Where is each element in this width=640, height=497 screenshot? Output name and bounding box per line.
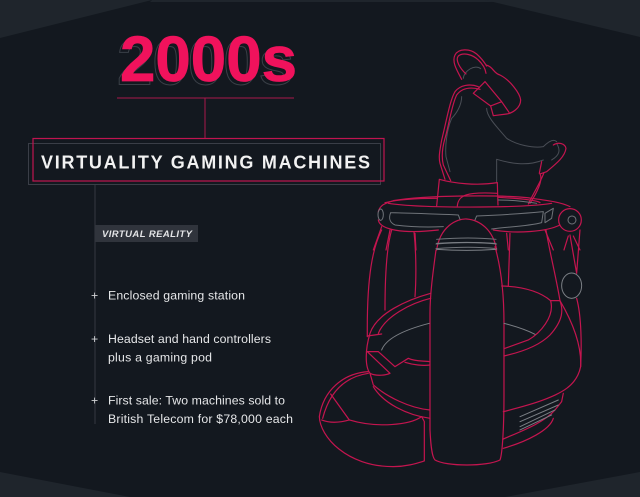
title: 2000s [117, 26, 294, 98]
title connector [117, 98, 294, 138]
rim details [378, 200, 576, 249]
headset and straps [437, 50, 566, 206]
player figure [373, 50, 581, 250]
illustration: virtual reality pod and player [319, 50, 582, 467]
heading box: VIRTUALITY GAMING MACHINES [41, 152, 370, 172]
gray details [382, 242, 582, 430]
category tag: VIRTUAL REALITY [102, 229, 194, 240]
bullet: enclosed station: + [91, 288, 98, 302]
bullet: headset and controllers [91, 332, 271, 364]
bullet: enclosed station: Enclosed gaming station [108, 288, 245, 302]
bullet: headset and controllers: plus a gaming pod [108, 350, 212, 364]
pod shell [366, 230, 581, 448]
pod rim [373, 196, 581, 250]
bullet list [91, 288, 293, 426]
bullet: first sale: British Telecom for $78,000 each [108, 412, 293, 426]
title: 2000s [120, 23, 297, 95]
timeline line [94, 185, 96, 424]
center column [430, 247, 504, 465]
category tag [95, 225, 198, 242]
heading box [28, 138, 384, 184]
player outline [446, 67, 559, 183]
pod body [319, 230, 582, 467]
bullet: headset and controllers: + [91, 332, 98, 346]
bullet: first sale [91, 394, 293, 426]
bullet: first sale: First sale: Two machines sold to [108, 394, 285, 408]
bullet: first sale: + [91, 394, 98, 408]
bullet: headset and controllers: Headset and hand controllers [108, 332, 271, 346]
footrest [319, 372, 424, 467]
